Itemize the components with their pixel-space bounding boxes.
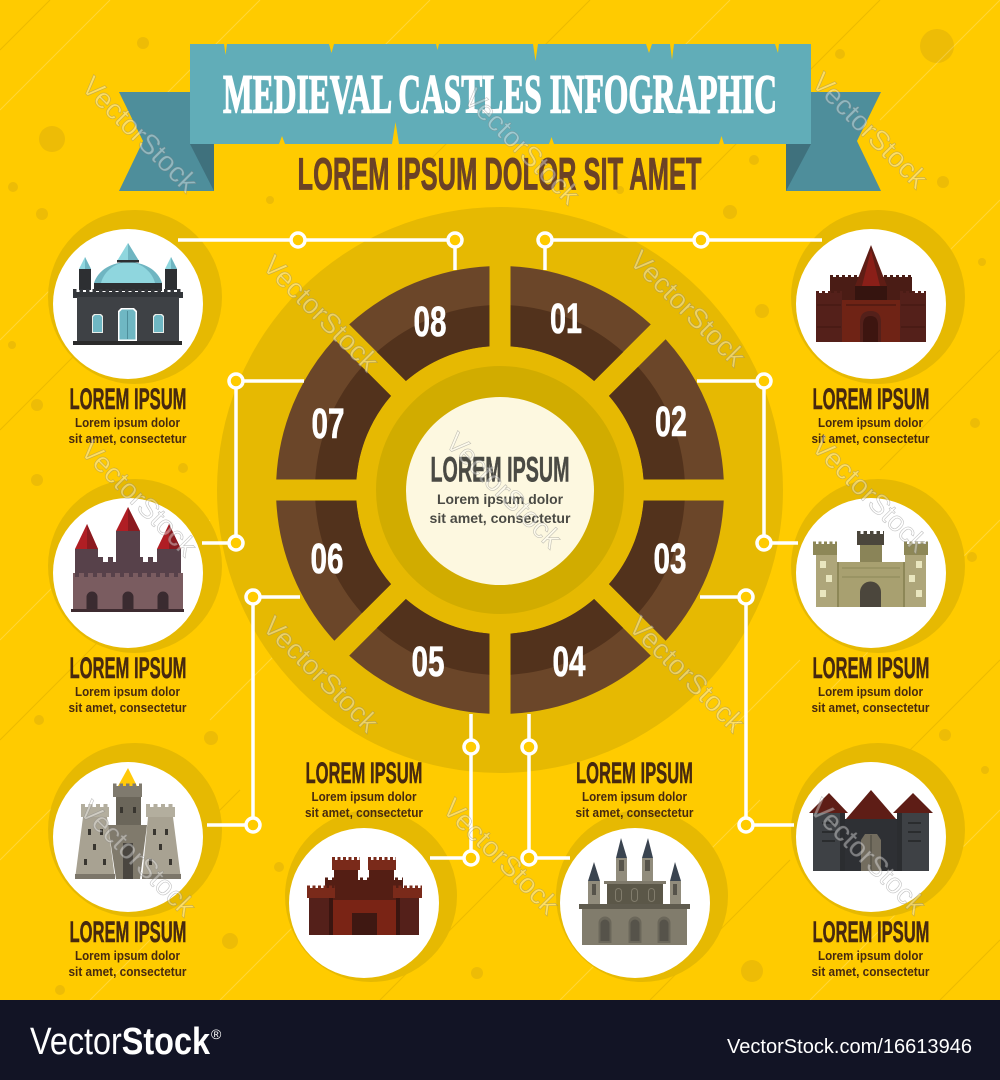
label: bottom-right item: Lorem ipsum dolor	[582, 790, 687, 804]
watermarks: VectorStock	[804, 792, 932, 921]
left ribbon tail	[119, 92, 214, 191]
segment numbers: 06	[310, 535, 344, 583]
segment numbers: 02	[655, 398, 687, 446]
centre text: sit amet, consectetur	[430, 510, 571, 526]
label: bottom-left item: Lorem ipsum dolor	[312, 790, 417, 804]
registered mark: ®	[211, 1026, 222, 1042]
subtitle: LOREM IPSUM DOLOR SIT AMET	[298, 148, 702, 200]
icon: domed dark castle	[73, 243, 183, 345]
watermarks: VectorStock	[437, 792, 565, 921]
label: lower-right item: Lorem ipsum dolor	[818, 949, 923, 963]
segment numbers: 01	[550, 295, 582, 343]
icon: dark castle with maroon roofs	[809, 790, 933, 871]
banner ribbon	[119, 44, 881, 191]
label: middle-right item: sit amet, consectetur	[812, 701, 930, 715]
segment numbers: 03	[654, 535, 686, 583]
label: middle-right item	[812, 652, 930, 715]
label: top-right item: Lorem ipsum dolor	[818, 416, 923, 430]
footer bar	[0, 1000, 1000, 1080]
item halos	[48, 210, 965, 982]
watermarks: VectorStock	[440, 426, 568, 555]
watermarks: VectorStock	[74, 794, 202, 923]
icon: grey castle with dark spires	[579, 838, 690, 945]
label: bottom-left item: LOREM IPSUM	[306, 757, 422, 790]
label: bottom-right item	[576, 757, 694, 820]
label: middle-left item: Lorem ipsum dolor	[75, 685, 180, 699]
centre text: Lorem ipsum dolor	[437, 491, 564, 507]
label: middle-left item: sit amet, consectetur	[68, 701, 187, 715]
centre text	[430, 450, 571, 526]
label: middle-left item	[68, 652, 187, 715]
label: middle-left item: LOREM IPSUM	[70, 652, 186, 685]
icon: mauve castle with red spires	[71, 507, 184, 612]
label: lower-right item	[812, 916, 930, 979]
watermarks: VectorStock	[257, 249, 385, 378]
watermarks: VectorStock	[458, 82, 586, 211]
white item discs	[53, 229, 946, 978]
centre text: LOREM IPSUM	[430, 450, 570, 490]
label: lower-left item: sit amet, consectetur	[68, 965, 187, 979]
label: top-left item	[68, 383, 187, 446]
inner ring	[376, 366, 624, 614]
watermarks: VectorStock	[257, 610, 385, 739]
ribbon body	[190, 44, 811, 144]
watermarks: VectorStock	[624, 244, 752, 373]
wheel backdrop	[217, 207, 783, 773]
label: top-right item: sit amet, consectetur	[812, 432, 930, 446]
centre disc	[406, 397, 594, 585]
segment numbers: 08	[414, 298, 446, 346]
label: lower-left item: Lorem ipsum dolor	[75, 949, 180, 963]
wheel segments	[235, 225, 765, 755]
watermarks	[74, 66, 934, 923]
segment numbers: 04	[552, 638, 586, 686]
icon: red brick castle with spire	[816, 245, 926, 342]
watermarks: VectorStock	[623, 610, 751, 739]
label: top-left item: Lorem ipsum dolor	[75, 416, 180, 430]
segment numbers	[310, 295, 687, 686]
right ribbon tail	[786, 92, 881, 191]
label: bottom-right item: sit amet, consectetur	[576, 806, 694, 820]
watermarks: VectorStock	[76, 70, 204, 199]
label: bottom-left item: sit amet, consectetur	[305, 806, 423, 820]
label: top-left item: LOREM IPSUM	[70, 383, 186, 416]
label: top-right item	[812, 383, 930, 446]
label: lower-left item: LOREM IPSUM	[70, 916, 186, 949]
segment numbers: 07	[312, 400, 344, 448]
segment numbers: 05	[412, 638, 444, 686]
central wheel	[217, 207, 783, 773]
label: bottom-left item	[305, 757, 423, 820]
watermarks: VectorStock	[806, 66, 934, 195]
label: middle-right item: Lorem ipsum dolor	[818, 685, 923, 699]
label: top-left item: sit amet, consectetur	[68, 432, 187, 446]
connector lines	[178, 233, 822, 865]
label: lower-left item	[68, 916, 187, 979]
label: bottom-right item: LOREM IPSUM	[576, 757, 693, 790]
icon: grey stone fortress with yellow spire	[75, 768, 181, 879]
watermarks: VectorStock	[806, 430, 934, 559]
icon: sand stone castle	[813, 532, 928, 607]
label: lower-right item: sit amet, consectetur	[812, 965, 930, 979]
footer image id: VectorStock.com/16613946	[727, 1036, 972, 1058]
footer logo: VectorStock	[30, 1021, 211, 1063]
icon: red brick fortress	[307, 858, 422, 935]
watermarks: VectorStock	[75, 434, 203, 563]
